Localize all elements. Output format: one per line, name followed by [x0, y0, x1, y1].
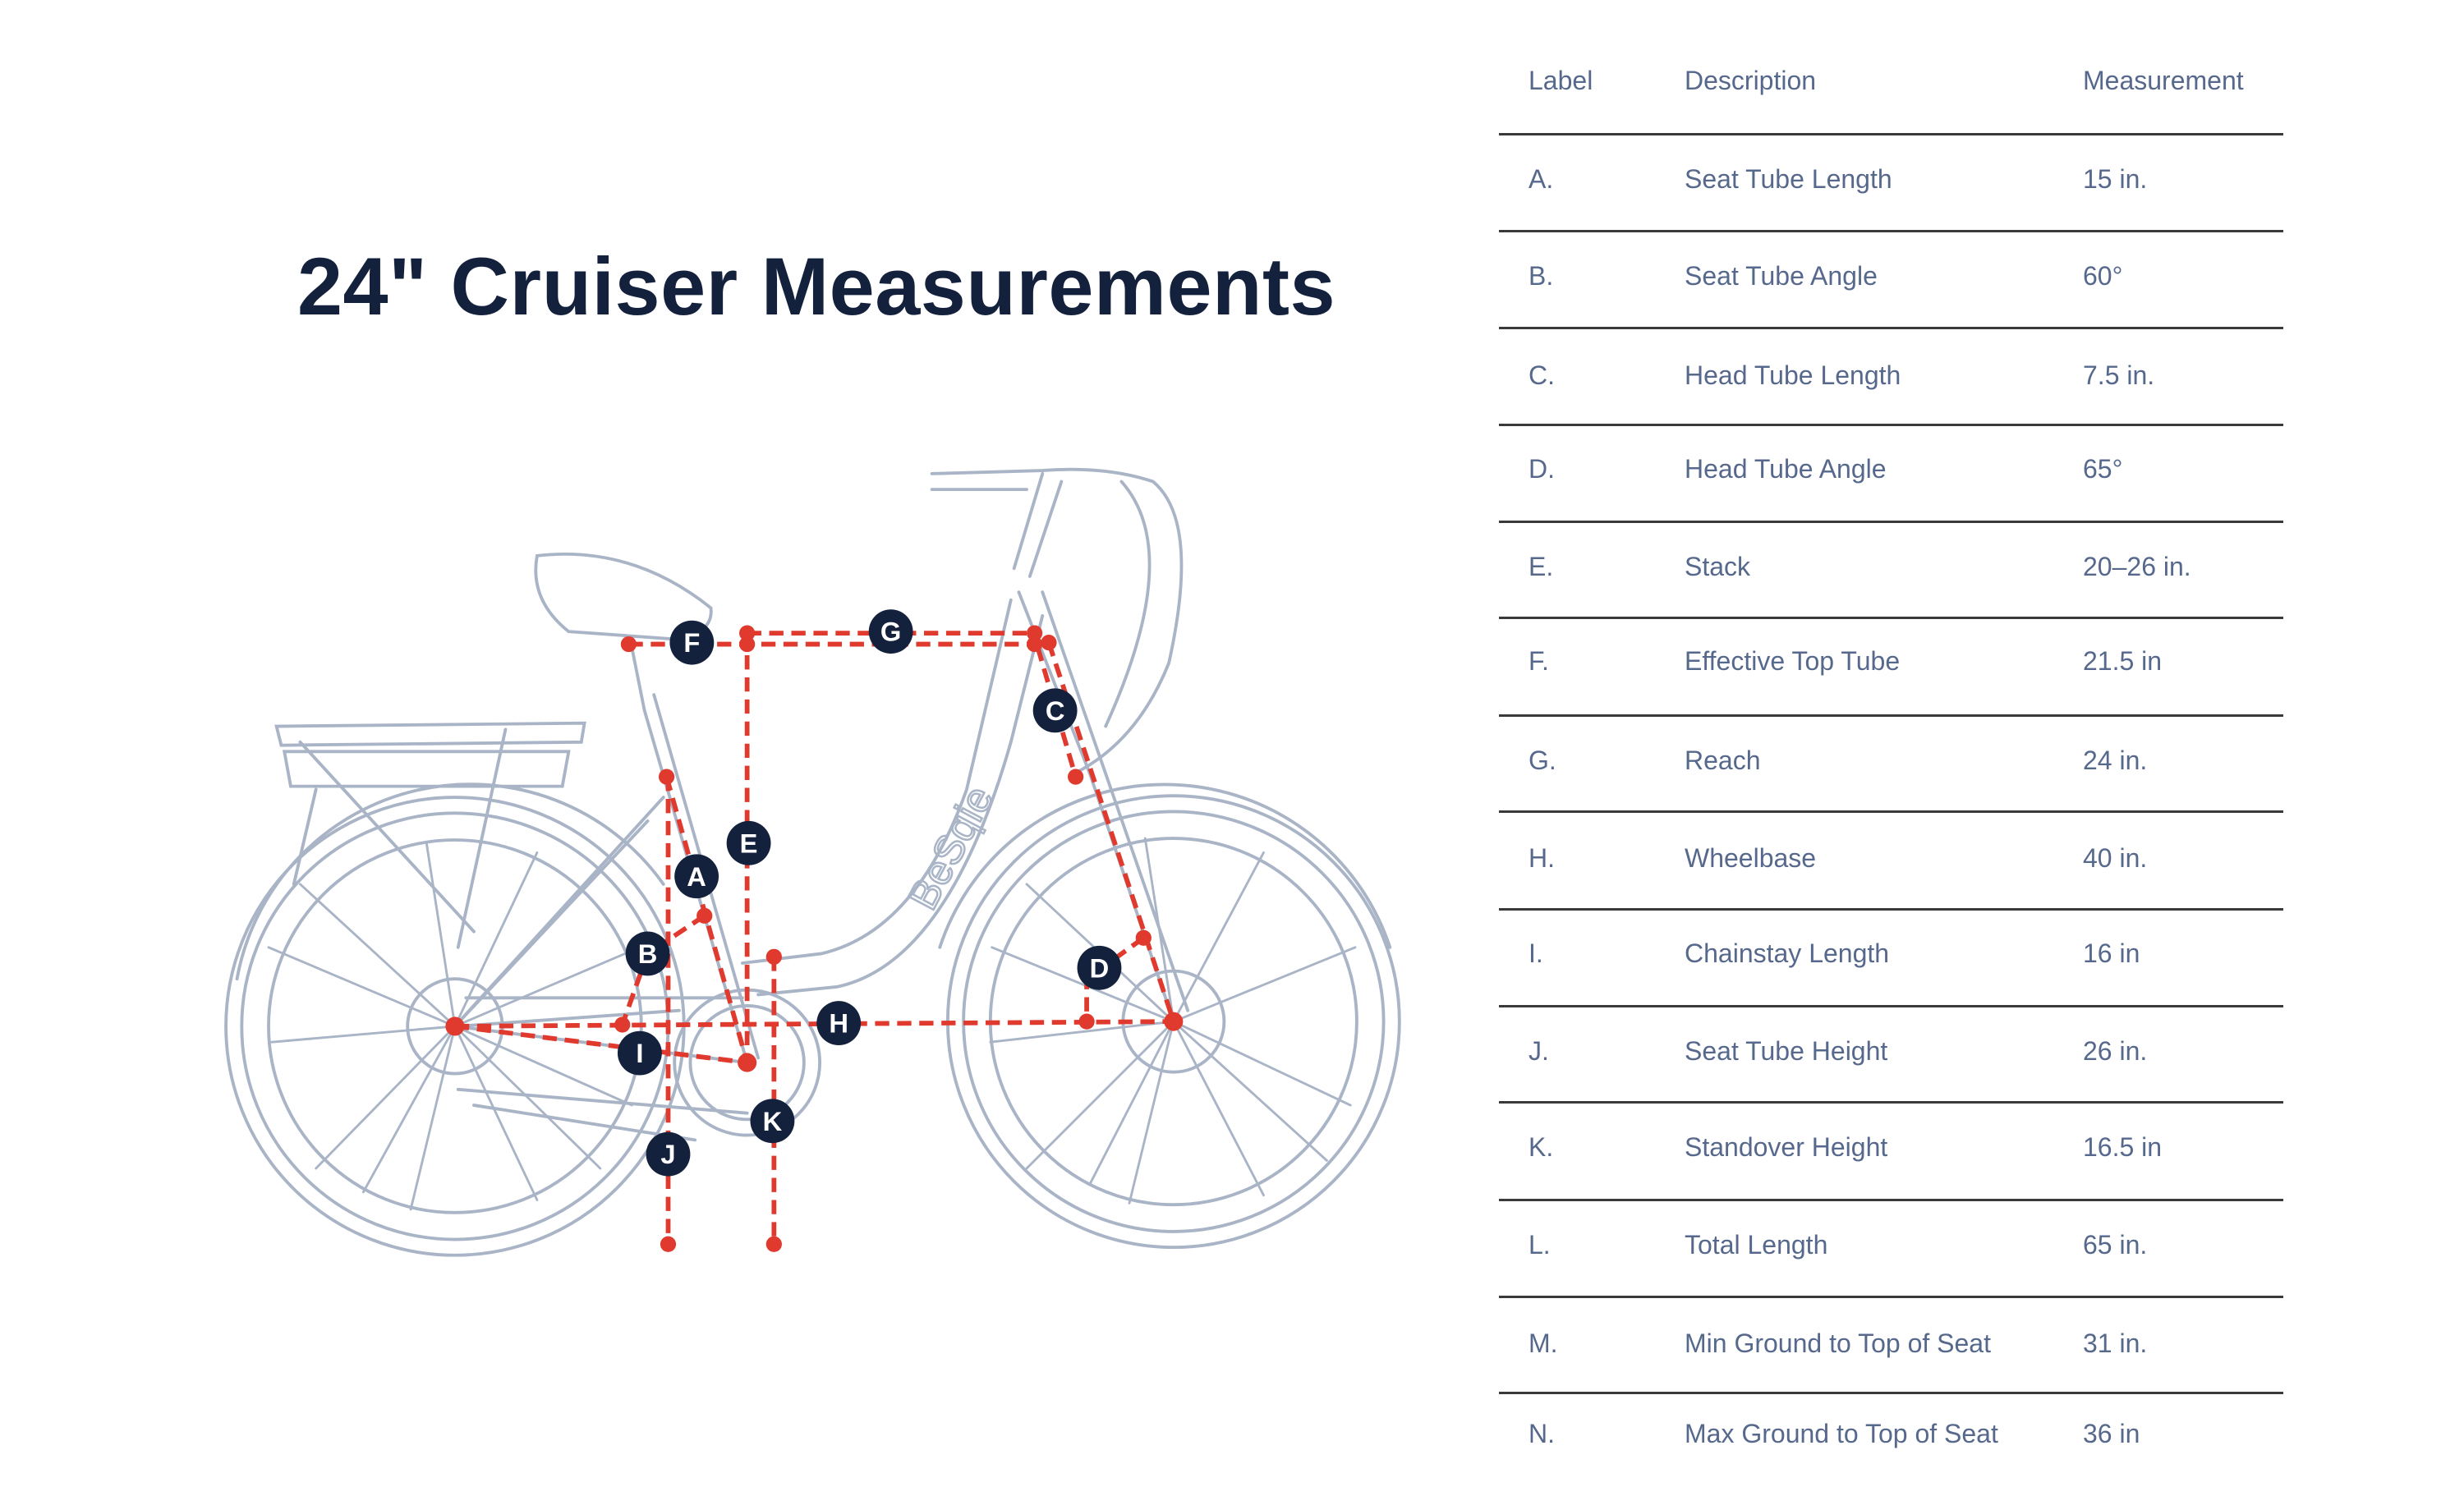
marker C	[1033, 688, 1078, 732]
measurements table: Head Tube Angle	[1685, 454, 1887, 484]
marker J: J	[660, 1139, 676, 1169]
marker H	[816, 1001, 861, 1045]
row G	[1529, 746, 2147, 775]
row N	[1529, 1419, 2140, 1448]
measurements table: Wheelbase	[1685, 843, 1816, 873]
measurements table	[1499, 66, 2283, 1448]
measurements table: N.	[1529, 1419, 1555, 1448]
marker C: C	[1046, 695, 1064, 726]
measurements table: G.	[1529, 746, 1556, 775]
measurements table: Seat Tube Angle	[1685, 261, 1878, 291]
measurements table: 15 in.	[2083, 164, 2147, 194]
marker F: F	[683, 627, 700, 658]
measurements table: C.	[1529, 360, 1555, 390]
row D	[1529, 454, 2122, 484]
measurements table: 20–26 in.	[2083, 552, 2191, 581]
measurements table: B.	[1529, 261, 1553, 291]
table header	[1529, 66, 2244, 95]
row M	[1529, 1329, 2147, 1358]
marker E	[727, 821, 770, 865]
marker B: B	[638, 938, 657, 969]
row H	[1529, 843, 2147, 873]
marker K	[750, 1099, 794, 1143]
measurements table: 24 in.	[2083, 746, 2147, 775]
measurements table: Effective Top Tube	[1685, 646, 1900, 676]
measurements table: Reach	[1685, 746, 1761, 775]
marker I: I	[636, 1038, 643, 1068]
marker I	[618, 1031, 662, 1076]
measurements table: 65 in.	[2083, 1230, 2147, 1260]
row C	[1529, 360, 2154, 390]
marker F	[669, 621, 714, 665]
measurements table: Seat Tube Length	[1685, 164, 1892, 194]
row B	[1529, 261, 2122, 291]
row K	[1529, 1132, 2162, 1162]
row L	[1529, 1230, 2147, 1260]
marker A: A	[687, 861, 706, 892]
measurements table: 16.5 in	[2083, 1132, 2162, 1162]
measurements table: I.	[1529, 938, 1543, 968]
measurements table: 16 in	[2083, 938, 2140, 968]
measurements table: K.	[1529, 1132, 1553, 1162]
measurements table: 40 in.	[2083, 843, 2147, 873]
measurements table: M.	[1529, 1329, 1558, 1358]
marker J	[646, 1132, 690, 1177]
measurements table: Seat Tube Height	[1685, 1036, 1887, 1066]
measurements table: 21.5 in	[2083, 646, 2162, 676]
bike frame drawing: BeSqie	[899, 778, 1002, 917]
measurements table: Description	[1685, 66, 1816, 95]
red measurement lines	[455, 633, 1174, 1244]
measurements table: Min Ground to Top of Seat	[1685, 1329, 1991, 1358]
measurements table: Measurement	[2083, 66, 2244, 95]
marker E: E	[740, 828, 757, 858]
measurements table: D.	[1529, 454, 1555, 484]
marker D	[1078, 946, 1121, 990]
marker G	[869, 609, 913, 654]
measurements table: J.	[1529, 1036, 1549, 1066]
row J	[1529, 1036, 2147, 1066]
red measurement dots	[445, 625, 1183, 1252]
marker G: G	[880, 617, 901, 647]
bike frame drawing	[226, 470, 1400, 1255]
marker H: H	[829, 1008, 848, 1039]
row I	[1529, 938, 2140, 968]
measurements table: Stack	[1685, 552, 1750, 581]
measurements table: 36 in	[2083, 1419, 2140, 1448]
measurements table: F.	[1529, 646, 1549, 676]
measurements table: 7.5 in.	[2083, 360, 2154, 390]
marker B	[626, 932, 669, 975]
measurements table: A.	[1529, 164, 1553, 194]
measurements table: Chainstay Length	[1685, 938, 1889, 968]
measurements table: E.	[1529, 552, 1553, 581]
measurements table: Label	[1529, 66, 1593, 95]
measurements table: Total Length	[1685, 1230, 1827, 1260]
marker D: D	[1090, 952, 1109, 983]
marker A	[674, 854, 719, 898]
row E	[1529, 552, 2191, 581]
measurements table: 65°	[2083, 454, 2122, 484]
measurements table: Head Tube Length	[1685, 360, 1901, 390]
row F	[1529, 646, 2162, 676]
measurements table: Standover Height	[1685, 1132, 1887, 1162]
label markers	[618, 609, 1121, 1177]
measurements table: L.	[1529, 1230, 1551, 1260]
row A	[1529, 164, 2147, 194]
measurements table: Max Ground to Top of Seat	[1685, 1419, 1998, 1448]
measurements table: 26 in.	[2083, 1036, 2147, 1066]
marker K: K	[763, 1106, 783, 1136]
measurements table: 31 in.	[2083, 1329, 2147, 1358]
measurements table: 60°	[2083, 261, 2122, 291]
title: 24" Cruiser Measurements	[297, 241, 1335, 332]
measurements table: H.	[1529, 843, 1555, 873]
